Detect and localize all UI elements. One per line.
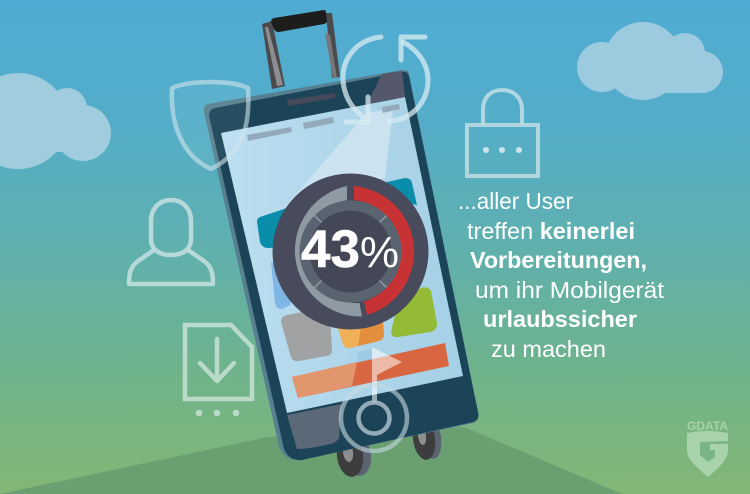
ground hill bbox=[0, 427, 622, 494]
gauge grey arc bbox=[295, 186, 362, 317]
orange bar bbox=[292, 343, 449, 398]
statement text: um ihr Mobilgerät bbox=[475, 277, 665, 303]
speaker bbox=[287, 93, 335, 106]
statement text: zu machen bbox=[491, 336, 606, 362]
app tile green bbox=[391, 287, 437, 337]
phone body bbox=[204, 70, 478, 460]
luggage handle bbox=[262, 10, 340, 89]
statement text bbox=[458, 188, 665, 362]
app tile blue bbox=[271, 262, 300, 309]
padlock icon bbox=[467, 90, 538, 176]
gauge inner ring bbox=[300, 200, 402, 302]
beam above bar bbox=[354, 349, 372, 378]
G DATA logo bbox=[687, 419, 728, 477]
download file icon bbox=[185, 325, 252, 416]
top glare bbox=[367, 71, 405, 104]
statement text: ...aller User bbox=[458, 188, 573, 214]
wheel left bbox=[334, 432, 374, 479]
percentage value: 43 bbox=[301, 220, 360, 279]
app tile teal bbox=[257, 208, 300, 248]
cloud right bbox=[577, 22, 723, 100]
gauge 43 percent: % bbox=[360, 228, 399, 277]
phone screen bbox=[221, 97, 463, 413]
gauge 43 percent bbox=[272, 174, 428, 330]
user icon bbox=[129, 200, 213, 284]
statement text: urlaubssicher bbox=[483, 306, 637, 332]
statement text: treffen keinerlei bbox=[467, 218, 635, 244]
statement text: Vorbereitungen, bbox=[470, 247, 647, 273]
home bar area bbox=[287, 404, 342, 449]
gauge red arc bbox=[354, 186, 414, 315]
app tile orange bbox=[337, 320, 384, 348]
cloud left bbox=[0, 73, 111, 169]
light beam bbox=[285, 110, 393, 207]
app tile grey bbox=[281, 308, 332, 361]
wheel right bbox=[410, 416, 444, 461]
sync icon bbox=[343, 37, 428, 122]
luggage wheels bbox=[334, 416, 444, 479]
play flag icon bbox=[341, 347, 407, 451]
G DATA logo: GDATA bbox=[687, 419, 728, 433]
shield icon bbox=[172, 82, 248, 169]
top status marks bbox=[247, 104, 400, 141]
